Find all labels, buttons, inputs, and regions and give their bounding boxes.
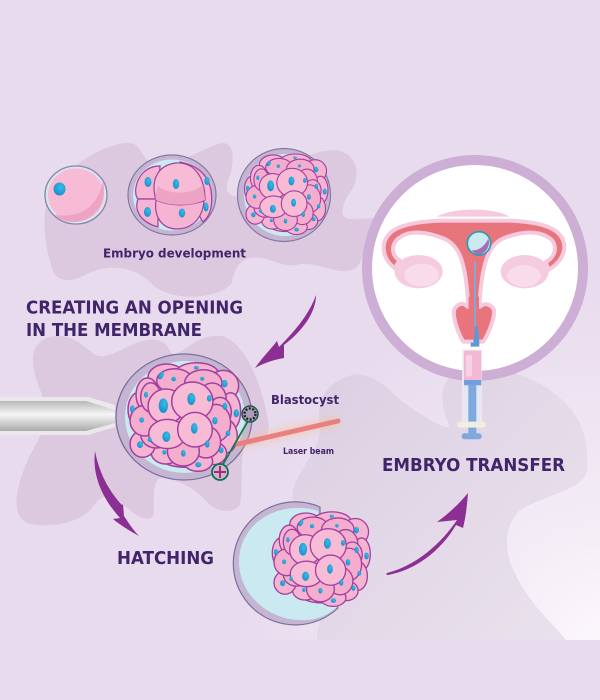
icon: holding pipette [0,397,115,435]
heading: embryo transfer: EMBRYO TRANSFER [382,456,565,476]
circle: uterus illustration [367,160,583,439]
background blob: lower right [293,368,587,640]
heading: creating an opening in the membrane: IN THE MEMBRANE [26,321,202,341]
heading: embryo development: Embryo development [103,246,246,260]
laser beam [238,421,338,444]
background blob: top [44,143,395,297]
heading: creating an opening in the membrane [26,298,243,341]
heading: hatching: HATCHING [117,549,214,569]
catheter [474,262,476,327]
heading: creating an opening in the membrane: CREATING AN OPENING [26,298,243,318]
laser targeting marker [212,406,258,480]
label: laser beam: Laser beam [283,447,334,457]
arrow: to hatching [94,451,139,536]
embryo stage 2: four cells [128,155,216,235]
syringe [457,326,486,439]
embryo stage 3: morula [238,148,330,242]
arrow: to embryo transfer [386,493,468,575]
arrow: to blastocyst [255,295,316,368]
background blob: middle [16,336,269,525]
hatching embryo [233,502,370,625]
transferred embryo [467,232,491,255]
blastocyst [116,354,252,480]
embryo stage 1: single cell [45,166,107,224]
uterus [384,210,564,439]
label: blastocyst: Blastocyst [271,393,339,407]
